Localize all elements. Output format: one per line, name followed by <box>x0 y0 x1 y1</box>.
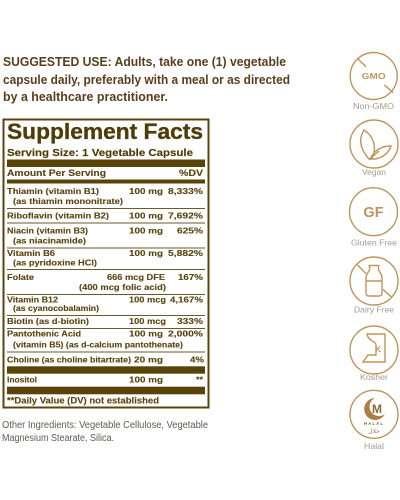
row: thiamin: 100 mg <box>129 186 163 196</box>
row: vitamin b12: Vitamin B12 <box>7 295 58 305</box>
footnote: **Daily Value (DV) not established <box>7 396 159 406</box>
row: biotin: 333% <box>177 316 204 326</box>
icon: non-gmo <box>350 52 397 111</box>
row: choline: 4% <box>190 354 204 364</box>
row: vitamin b12: (as cyanocobalamin) <box>13 303 99 313</box>
table header <box>7 168 204 179</box>
row: choline <box>7 354 204 364</box>
row: vitamin b6: 100 mg <box>129 248 163 258</box>
other ingredients <box>2 420 208 444</box>
row: pantothenic acid: (vitamin B5) (as d-calcium pantothenate) <box>13 339 183 349</box>
icon: halal: M <box>372 402 382 416</box>
row: inositol: 100 mg <box>129 374 163 384</box>
row: pantothenic acid: Pantothenic Acid <box>7 329 81 339</box>
row: vitamin b6: Vitamin B6 <box>7 248 55 258</box>
row: biotin: 100 mcg <box>129 316 166 326</box>
serving size: Serving Size: 1 Vegetable Capsule <box>7 147 193 159</box>
row: pantothenic acid <box>7 329 204 349</box>
icon: non-gmo: GMO <box>362 72 386 81</box>
suggested use text <box>3 55 290 104</box>
row: vitamin b12: 4,167% <box>170 295 203 305</box>
row: biotin: Biotin (as d-biotin) <box>7 316 89 326</box>
row: folate: 167% <box>178 272 203 282</box>
row: riboflavin: Riboflavin (vitamin B2) <box>7 211 109 221</box>
row: riboflavin: 100 mg <box>129 211 163 221</box>
suggested use text: capsule daily, preferably with a meal or as directed <box>3 73 290 87</box>
row: folate: 666 mcg DFE <box>107 272 165 282</box>
row: inositol: Inositol <box>7 374 37 384</box>
icon: halal: حلال <box>368 428 380 435</box>
icon: vegan: Vegan <box>362 167 386 177</box>
icon: gluten free: Gluten Free <box>351 238 397 248</box>
icon: gluten free: GF <box>363 205 384 221</box>
row: thiamin <box>7 186 204 206</box>
row: pantothenic acid: 100 mg <box>129 329 163 339</box>
row: choline: 20 mg <box>134 354 163 364</box>
row: vitamin b12 <box>7 295 203 313</box>
row: vitamin b12: 100 mcg <box>129 295 166 305</box>
row: riboflavin <box>7 211 204 221</box>
row: niacin: 100 mg <box>129 225 163 235</box>
row: vitamin b6 <box>7 248 204 267</box>
row: biotin <box>7 316 204 326</box>
icon: kosher: K <box>375 345 381 354</box>
row: niacin: (as niacinamide) <box>13 235 86 245</box>
row: pantothenic acid: 2,000% <box>168 329 204 339</box>
icon: halal <box>350 390 398 451</box>
icon: halal: Halal <box>364 441 384 451</box>
row: thiamin: Thiamin (vitamin B1) <box>7 186 99 196</box>
row: folate: (400 mcg folic acid) <box>79 282 166 292</box>
icon: gluten free <box>350 188 398 248</box>
suggested use text: by a healthcare practitioner. <box>3 90 168 104</box>
row: thiamin: (as thiamin mononitrate) <box>13 196 123 206</box>
icon: dairy free: Dairy Free <box>354 305 394 315</box>
icon: non-gmo: Non-GMO <box>353 101 394 111</box>
table header: Amount Per Serving <box>7 168 106 179</box>
row: inositol: ** <box>196 374 204 384</box>
icon: halal: HALAL <box>364 421 384 426</box>
row: niacin <box>7 225 204 245</box>
heading: supplement facts: Supplement Facts <box>7 119 203 144</box>
row: niacin: 625% <box>177 225 204 235</box>
icon: vegan <box>350 120 398 177</box>
row: folate: Folate <box>7 272 34 282</box>
row: folate <box>7 272 203 292</box>
icon: kosher <box>350 326 398 382</box>
row: vitamin b6: (as pyridoxine HCl) <box>13 257 97 267</box>
suggested use text: SUGGESTED USE: Adults, take one (1) vegetable <box>3 55 286 69</box>
row: thiamin: 8,333% <box>168 186 204 196</box>
row: riboflavin: 7,692% <box>168 211 204 221</box>
row: vitamin b6: 5,882% <box>168 248 204 258</box>
icon: dairy free <box>350 257 398 315</box>
row: inositol <box>7 374 204 384</box>
other ingredients: Other Ingredients: Vegetable Cellulose, Vegetable <box>2 420 208 431</box>
table header: %DV <box>179 168 204 179</box>
icon: kosher: Kosher <box>360 372 388 382</box>
other ingredients: Magnesium Stearate, Silica. <box>2 433 114 444</box>
panel: supplement facts <box>4 119 208 408</box>
row: niacin: Niacin (vitamin B3) <box>7 225 88 235</box>
row: choline: Choline (as choline bitartrate) <box>7 354 131 364</box>
